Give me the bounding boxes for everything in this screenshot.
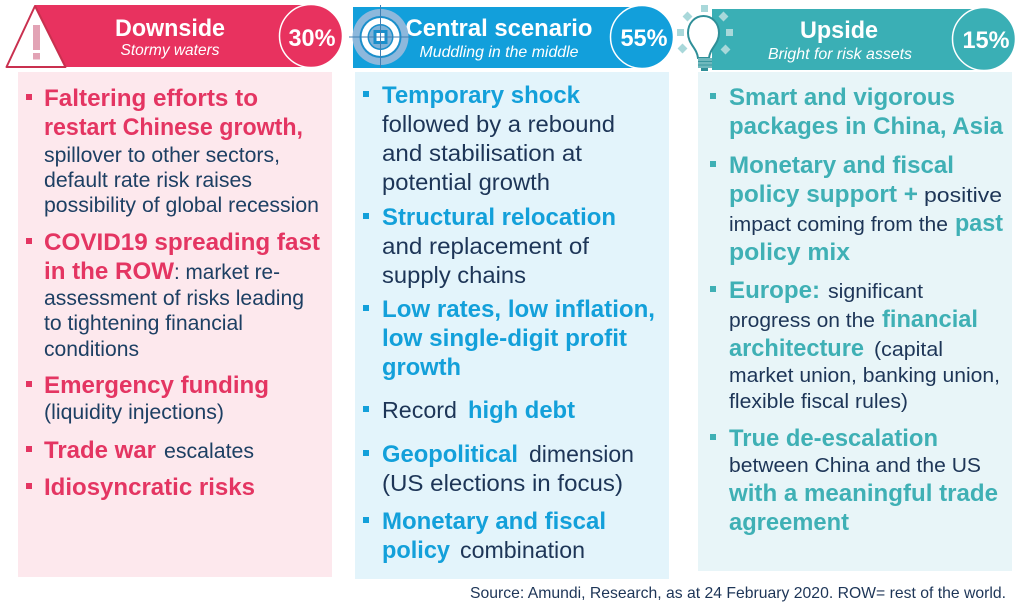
bullet: europe: (capital — [874, 339, 943, 361]
bullet: geopolitical: (US elections in focus) — [382, 470, 623, 496]
bullet: structural relocation: Structural relocation — [382, 204, 616, 231]
icon: target — [349, 5, 413, 68]
header: upside banner — [712, 8, 1016, 70]
header: central banner — [353, 6, 674, 68]
bullet: record high debt: high debt — [468, 397, 575, 424]
header: upside banner: Upside — [800, 17, 878, 44]
header: downside banner: Stormy waters — [120, 42, 220, 59]
bullet: trade war: Trade war — [44, 437, 156, 464]
bullet: true de-escalation: between China and the US — [729, 455, 981, 477]
bullet: emergency funding — [26, 372, 269, 424]
bullet: covid19: assessment of risks leading — [44, 287, 304, 310]
bullet: covid19: conditions — [44, 338, 139, 361]
bullet: covid19 — [26, 229, 320, 361]
bullet: covid19: COVID19 spreading fast — [44, 229, 320, 256]
icon: warning triangle — [6, 6, 66, 67]
bullet: geopolitical: dimension — [529, 441, 634, 467]
bullet: monetary and fiscal: policy — [382, 537, 451, 564]
bullet: structural relocation: supply chains — [382, 262, 526, 288]
bullet: temporary shock — [363, 82, 615, 195]
bullet: low rates: growth — [382, 354, 461, 381]
bullet: europe: flexible fiscal rules) — [729, 391, 908, 413]
bullet: europe — [710, 277, 1000, 413]
bullet: monetary and fiscal policy support: impact coming from the — [729, 214, 948, 236]
header: central banner: Central scenario — [406, 15, 592, 42]
bullet: smart packages — [710, 84, 1004, 140]
bullet: europe: architecture — [729, 335, 864, 362]
bullet: low rates: Low rates, low inflation, — [382, 296, 655, 323]
bullet: true de-escalation — [710, 425, 998, 536]
header: upside banner: Bright for risk assets — [768, 46, 912, 63]
bullet: record high debt: Record — [382, 397, 457, 423]
bullet: faltering efforts — [26, 85, 319, 217]
bullet: idiosyncratic risks: Idiosyncratic risks — [44, 474, 255, 501]
bullet: europe: Europe: — [729, 277, 820, 304]
bullet: true de-escalation: True de-escalation — [729, 425, 938, 452]
bullet: emergency funding: (liquidity injections) — [44, 401, 224, 424]
bullet: covid19: to tightening financial — [44, 312, 243, 335]
bullet: true de-escalation: with a meaningful trade — [728, 480, 998, 507]
bullet: europe: significant — [828, 281, 923, 303]
bullet: temporary shock: Temporary shock — [382, 82, 581, 109]
bullet: monetary and fiscal policy support — [710, 152, 1003, 266]
bullet: monetary and fiscal policy support: Monetary and fiscal — [729, 152, 954, 179]
panel: upside — [677, 5, 1016, 571]
bullet: geopolitical — [363, 441, 634, 496]
bullet: monetary and fiscal policy support: policy support + — [729, 181, 918, 208]
bullet: temporary shock: potential growth — [382, 169, 550, 195]
bullet: covid19: in the ROW — [44, 258, 174, 285]
bullet: smart packages: Smart and vigorous — [729, 84, 955, 111]
header: downside banner: Downside — [115, 15, 225, 42]
bullet: low rates — [363, 296, 655, 381]
bullet: true de-escalation: agreement — [729, 509, 849, 536]
bullet: europe: market union, banking union, — [729, 365, 1000, 387]
bullet: faltering efforts: Faltering efforts to — [44, 85, 258, 112]
bullet: temporary shock: and stabilisation at — [382, 140, 583, 166]
bullet: smart packages: packages in China, Asia — [729, 113, 1004, 140]
bullet: monetary and fiscal: combination — [460, 537, 585, 563]
source note: Source: Amundi, Research, as at 24 February 2020. ROW= rest of the world. — [470, 585, 1006, 602]
bullet: structural relocation: and replacement of — [382, 233, 590, 259]
header: central banner: 55% — [620, 25, 668, 52]
bullet: low rates: low single-digit profit — [382, 325, 627, 352]
bullet: monetary and fiscal — [363, 508, 606, 564]
bullet: geopolitical: Geopolitical — [382, 441, 518, 468]
bullet: faltering efforts: spillover to other sectors, — [44, 144, 280, 167]
header: upside banner: 15% — [962, 27, 1010, 54]
bullet: covid19: : market re- — [174, 261, 280, 284]
header: central banner: Muddling in the middle — [420, 44, 579, 61]
bullet: europe: progress on the — [729, 310, 875, 332]
panel: downside — [6, 4, 342, 577]
panel: central scenario — [349, 5, 674, 579]
bullet: monetary and fiscal policy support: past — [955, 210, 1003, 237]
bullet: faltering efforts: possibility of global recession — [44, 194, 319, 217]
bullet: monetary and fiscal policy support: positive — [924, 185, 1002, 207]
bullet: record high debt — [363, 397, 575, 424]
bullet: trade war — [26, 437, 254, 464]
bullet: monetary and fiscal: Monetary and fiscal — [382, 508, 606, 535]
bullet: structural relocation — [363, 204, 616, 288]
bullet: europe: financial — [882, 306, 978, 333]
header: downside banner: 30% — [288, 25, 336, 52]
bullet: faltering efforts: default rate risk raises — [44, 169, 252, 192]
header: downside banner — [35, 4, 342, 68]
bullet: trade war: escalates — [164, 440, 254, 463]
bullet: temporary shock: followed by a rebound — [382, 111, 615, 137]
bullet: faltering efforts: restart Chinese growth, — [44, 114, 303, 141]
icon: light bulb — [677, 5, 733, 71]
bullet: emergency funding: Emergency funding — [44, 372, 269, 399]
bullet: monetary and fiscal policy support: policy mix — [729, 239, 851, 266]
